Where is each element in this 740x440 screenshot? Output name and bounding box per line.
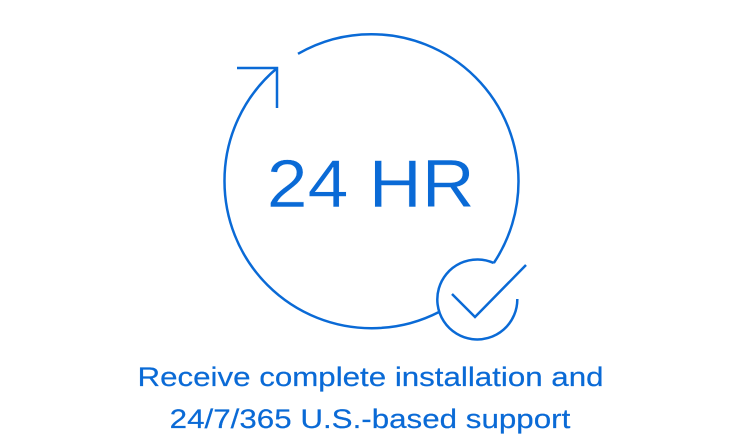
icon: check mark in circle: [437, 259, 526, 339]
caption text: [138, 362, 604, 434]
heading: 24 HR: 24 HR: [267, 146, 475, 222]
caption text: 24/7/365 U.S.-based support: [170, 404, 571, 434]
icon: circular arrow around 24 HR: [224, 34, 519, 328]
caption text: Receive complete installation and: [138, 362, 604, 392]
